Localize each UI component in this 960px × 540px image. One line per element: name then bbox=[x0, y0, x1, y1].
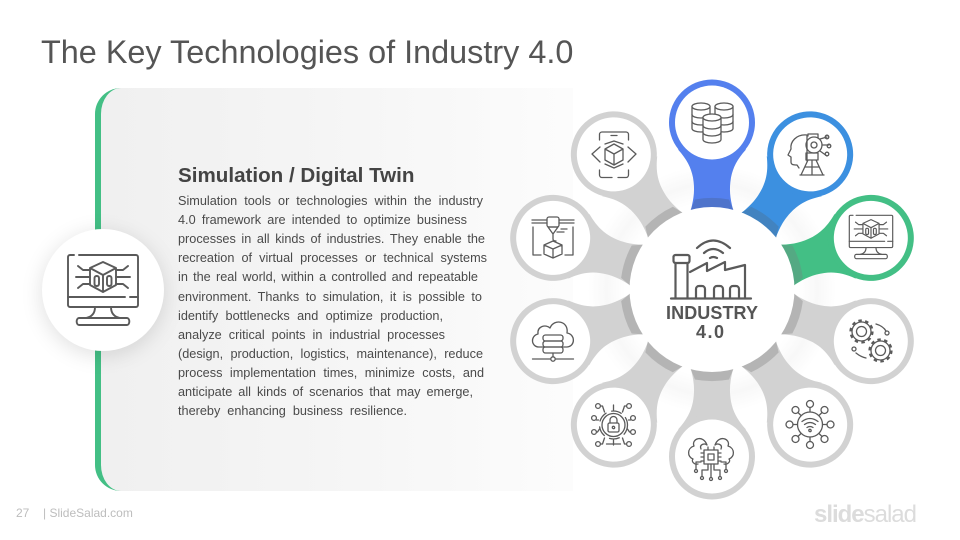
footer: site name: | SlideSalad.com bbox=[43, 506, 133, 520]
node: simulation, green bbox=[773, 184, 925, 306]
icon circle: selected technology bbox=[42, 229, 164, 351]
node: wireless network bbox=[723, 327, 870, 485]
text block: description: anticipate all kinds of scenarios that may emerge, bbox=[178, 385, 473, 399]
logo: slidesalad: slidesalad bbox=[814, 501, 917, 528]
node: cyber security bbox=[554, 327, 701, 485]
node: brain chip bbox=[669, 368, 755, 500]
icon: brain with chip bbox=[689, 439, 733, 480]
text block: description: identify bottlenecks and optimize production, bbox=[178, 309, 443, 323]
icon: AR phone with cube bbox=[592, 132, 636, 178]
label: INDUSTRY 4.0 bbox=[666, 303, 758, 342]
icon: monitor with digital twin cube bbox=[68, 255, 138, 325]
text block: description: in the real world, within a controlled and repeatable bbox=[178, 270, 478, 284]
page number: 27 bbox=[16, 506, 29, 520]
text block: description: thereby enhancing business resilience. bbox=[178, 404, 407, 418]
text block: description: analyze critical points in industrial processes bbox=[178, 328, 445, 342]
icon: gears bbox=[850, 320, 892, 362]
icon: AI head with circuit bbox=[788, 134, 831, 175]
icon: wifi network bbox=[786, 400, 834, 448]
label: INDUSTRY 4.0: INDUSTRY bbox=[666, 303, 758, 323]
text block: description: process implementation times, minimize costs, and bbox=[178, 366, 484, 380]
icon: 3D printer bbox=[532, 217, 574, 258]
label: INDUSTRY 4.0: 4.0 bbox=[696, 322, 724, 342]
text block: description: 4.0 framework are intended to optimize business bbox=[178, 213, 467, 227]
icon: cloud server bbox=[532, 322, 574, 361]
heading: Simulation / Digital Twin: Simulation / Digital Twin bbox=[178, 164, 414, 187]
diagram: industry 4.0 hub bbox=[499, 80, 925, 500]
text block: description: environment. Thanks to simulation, it is possible to bbox=[178, 290, 482, 304]
node: artificial intelligence, light blue bbox=[723, 94, 870, 252]
node: gears bbox=[773, 273, 925, 395]
node: AR phone bbox=[554, 94, 701, 252]
soft halo behind hub bbox=[588, 166, 836, 414]
panel: description background bbox=[95, 88, 573, 491]
text block: description: (design, production, logistics, maintenance), reduce bbox=[178, 347, 483, 361]
icon: factory with wifi bbox=[671, 240, 751, 298]
icon: monitor with cube, small bbox=[849, 215, 893, 259]
text block: description: recreation of virtual processes or technical systems bbox=[178, 251, 487, 265]
icon: stacked databases bbox=[692, 103, 733, 143]
text block: description bbox=[178, 194, 487, 418]
text block: description: Simulation tools or technologies within the industry bbox=[178, 194, 483, 208]
icon: circuit lock bbox=[592, 404, 635, 446]
node: 3D printer bbox=[499, 184, 651, 306]
node: big data, blue bbox=[669, 80, 755, 212]
text block: description: processes in all kinds of industries. They enable the bbox=[178, 232, 485, 246]
hub circle bbox=[630, 207, 794, 372]
title: The Key Technologies of Industry 4.0 bbox=[41, 34, 573, 70]
node: cloud server bbox=[499, 273, 651, 395]
